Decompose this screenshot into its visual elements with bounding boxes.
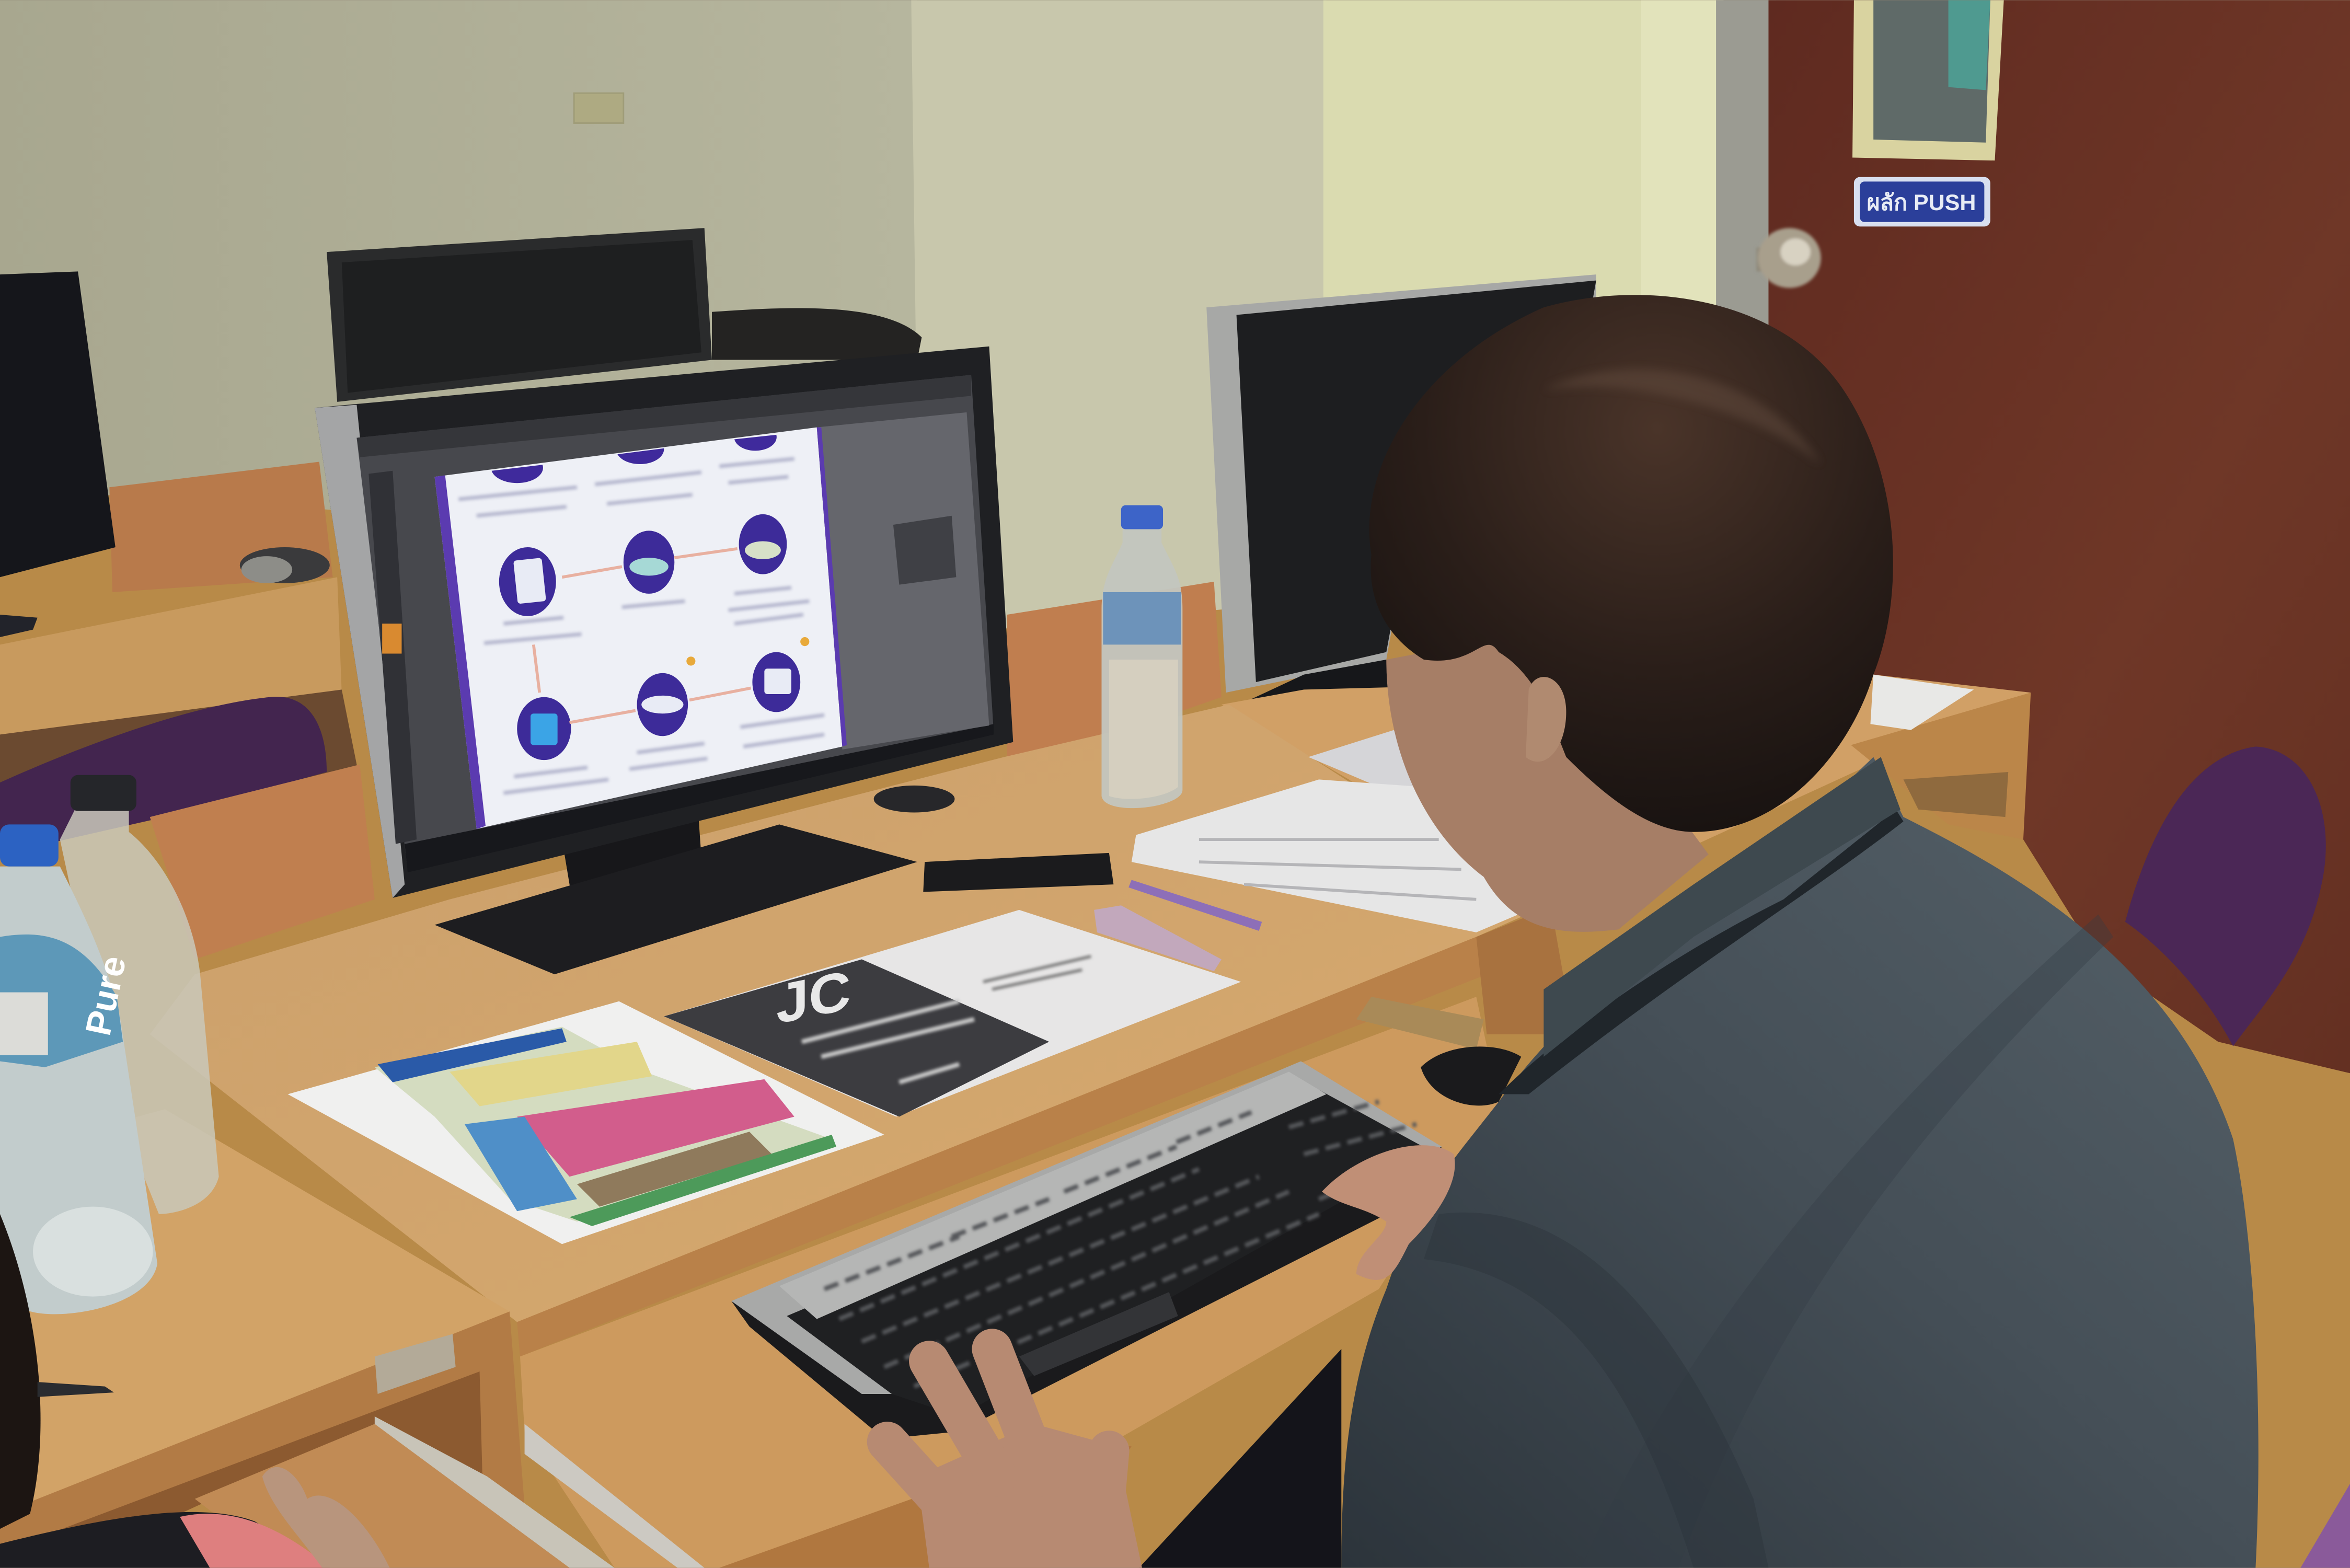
keyboard (731, 1061, 1442, 1439)
mouse on tray (1421, 1046, 1521, 1105)
neck and face (1386, 630, 1709, 932)
hair (1369, 295, 1893, 832)
icon circles (491, 435, 809, 760)
monitor stand (435, 786, 954, 974)
monitor bezel (315, 347, 1013, 898)
JC booklet: JC (776, 959, 851, 1036)
connector lines (534, 549, 751, 722)
main monitor (315, 347, 1013, 974)
right chair (2125, 746, 2326, 1046)
monitor far left (0, 271, 330, 637)
ear (1526, 677, 1566, 762)
left hand (887, 1349, 1142, 1568)
purple chair rear left (0, 697, 327, 855)
floor (2203, 1042, 2350, 1568)
back right desk (1222, 675, 2031, 914)
smartphone on desk (923, 853, 1113, 892)
monitor back right (1192, 274, 1596, 753)
front bottle (0, 824, 157, 1314)
papers on desk right (1132, 730, 1536, 932)
caption lines (458, 459, 824, 793)
purple pen (1128, 880, 1262, 931)
person (887, 295, 2259, 1568)
monitor back center (327, 228, 921, 402)
main desk (150, 705, 1574, 1568)
door handle (1757, 228, 1821, 288)
monitor screen (356, 375, 994, 871)
front left desk (0, 1109, 615, 1568)
shirt (1341, 757, 2259, 1568)
pen (38, 1382, 114, 1397)
sliding keyboard tray (520, 997, 1499, 1568)
infographic printout (288, 1001, 884, 1244)
sleeve shadow (1581, 914, 2113, 1568)
water bottles front left (0, 775, 219, 1314)
illustrator document artboard (435, 428, 847, 829)
door sign: ผลัก PUSH (1867, 190, 1976, 215)
person at lower-left edge (0, 1214, 390, 1568)
front bottle: Pure (78, 952, 134, 1039)
door sign (1854, 177, 1990, 226)
small tag on desk (1094, 905, 1222, 971)
collar (1499, 810, 1904, 1094)
light switch (574, 93, 624, 123)
door (1757, 0, 2350, 1073)
tool panels (893, 516, 956, 585)
rear bottle (60, 775, 219, 1214)
fingers: right hand on keyboard (1322, 1145, 1455, 1280)
JC booklet (664, 910, 1241, 1117)
back orange panels and back desk (0, 462, 1222, 839)
arm dark (1139, 1349, 1341, 1568)
purple chair lower right (2300, 1484, 2350, 1568)
water bottle on desk (1102, 505, 1182, 808)
